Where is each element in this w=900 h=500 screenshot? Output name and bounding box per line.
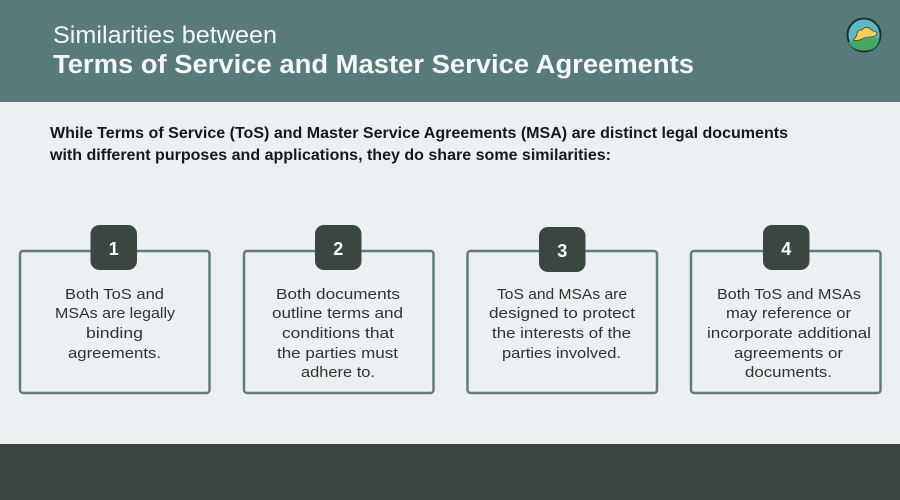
footer band: [0, 444, 900, 500]
card 3 text: ToS and MSAs are: [497, 287, 627, 303]
badge 2: 2: [333, 239, 343, 259]
title: Terms of Service and Master Service Agreements: [53, 51, 694, 79]
intro text: [49, 125, 788, 164]
icon: logo: [848, 18, 880, 52]
panel: card 4: [691, 225, 880, 393]
card 2 text: outline terms and: [272, 306, 403, 322]
card 1 text: [55, 287, 176, 362]
title: [53, 22, 694, 79]
card 4 text: Both ToS and MSAs: [717, 287, 861, 303]
badge 3: [539, 227, 586, 272]
panel: card 3: [468, 227, 657, 393]
card 2 text: Both documents: [276, 287, 400, 303]
title: Similarities between: [53, 22, 277, 49]
badge 4: 4: [781, 239, 791, 259]
card 4 text: incorporate additional: [707, 326, 871, 342]
intro text: with different purposes and applications, they do share some similarities:: [49, 147, 611, 164]
panel: card 2: [244, 225, 434, 393]
intro text: While Terms of Service (ToS) and Master Service Agreements (MSA) are distinct legal documents: [50, 125, 788, 142]
card 3 text: [489, 287, 635, 362]
card 4 text: may reference or: [726, 306, 851, 322]
card 4 text: documents.: [745, 365, 832, 381]
card 3 text: designed to protect: [489, 306, 635, 322]
card 3 text: parties involved.: [502, 346, 621, 362]
card 1 text: binding: [86, 326, 143, 342]
badge 2: [315, 225, 362, 270]
card 4 text: [707, 287, 871, 381]
card 1 text: Both ToS and: [65, 287, 164, 303]
badge 3: 3: [557, 241, 567, 261]
header band: [0, 0, 900, 102]
badge 4: [763, 225, 810, 270]
card 2 text: [272, 287, 403, 381]
card 3 text: the interests of the: [492, 326, 631, 342]
card 2 text: the parties must: [277, 346, 398, 362]
card 1 text: MSAs are legally: [55, 306, 176, 322]
panel: card 1: [20, 225, 210, 393]
badge 1: [90, 225, 137, 270]
card 4 text: agreements or: [734, 346, 843, 362]
card 2 text: adhere to.: [301, 365, 375, 381]
card 1 text: agreements.: [68, 346, 161, 362]
card 2 text: conditions that: [282, 326, 394, 342]
badge 1: 1: [109, 239, 119, 259]
